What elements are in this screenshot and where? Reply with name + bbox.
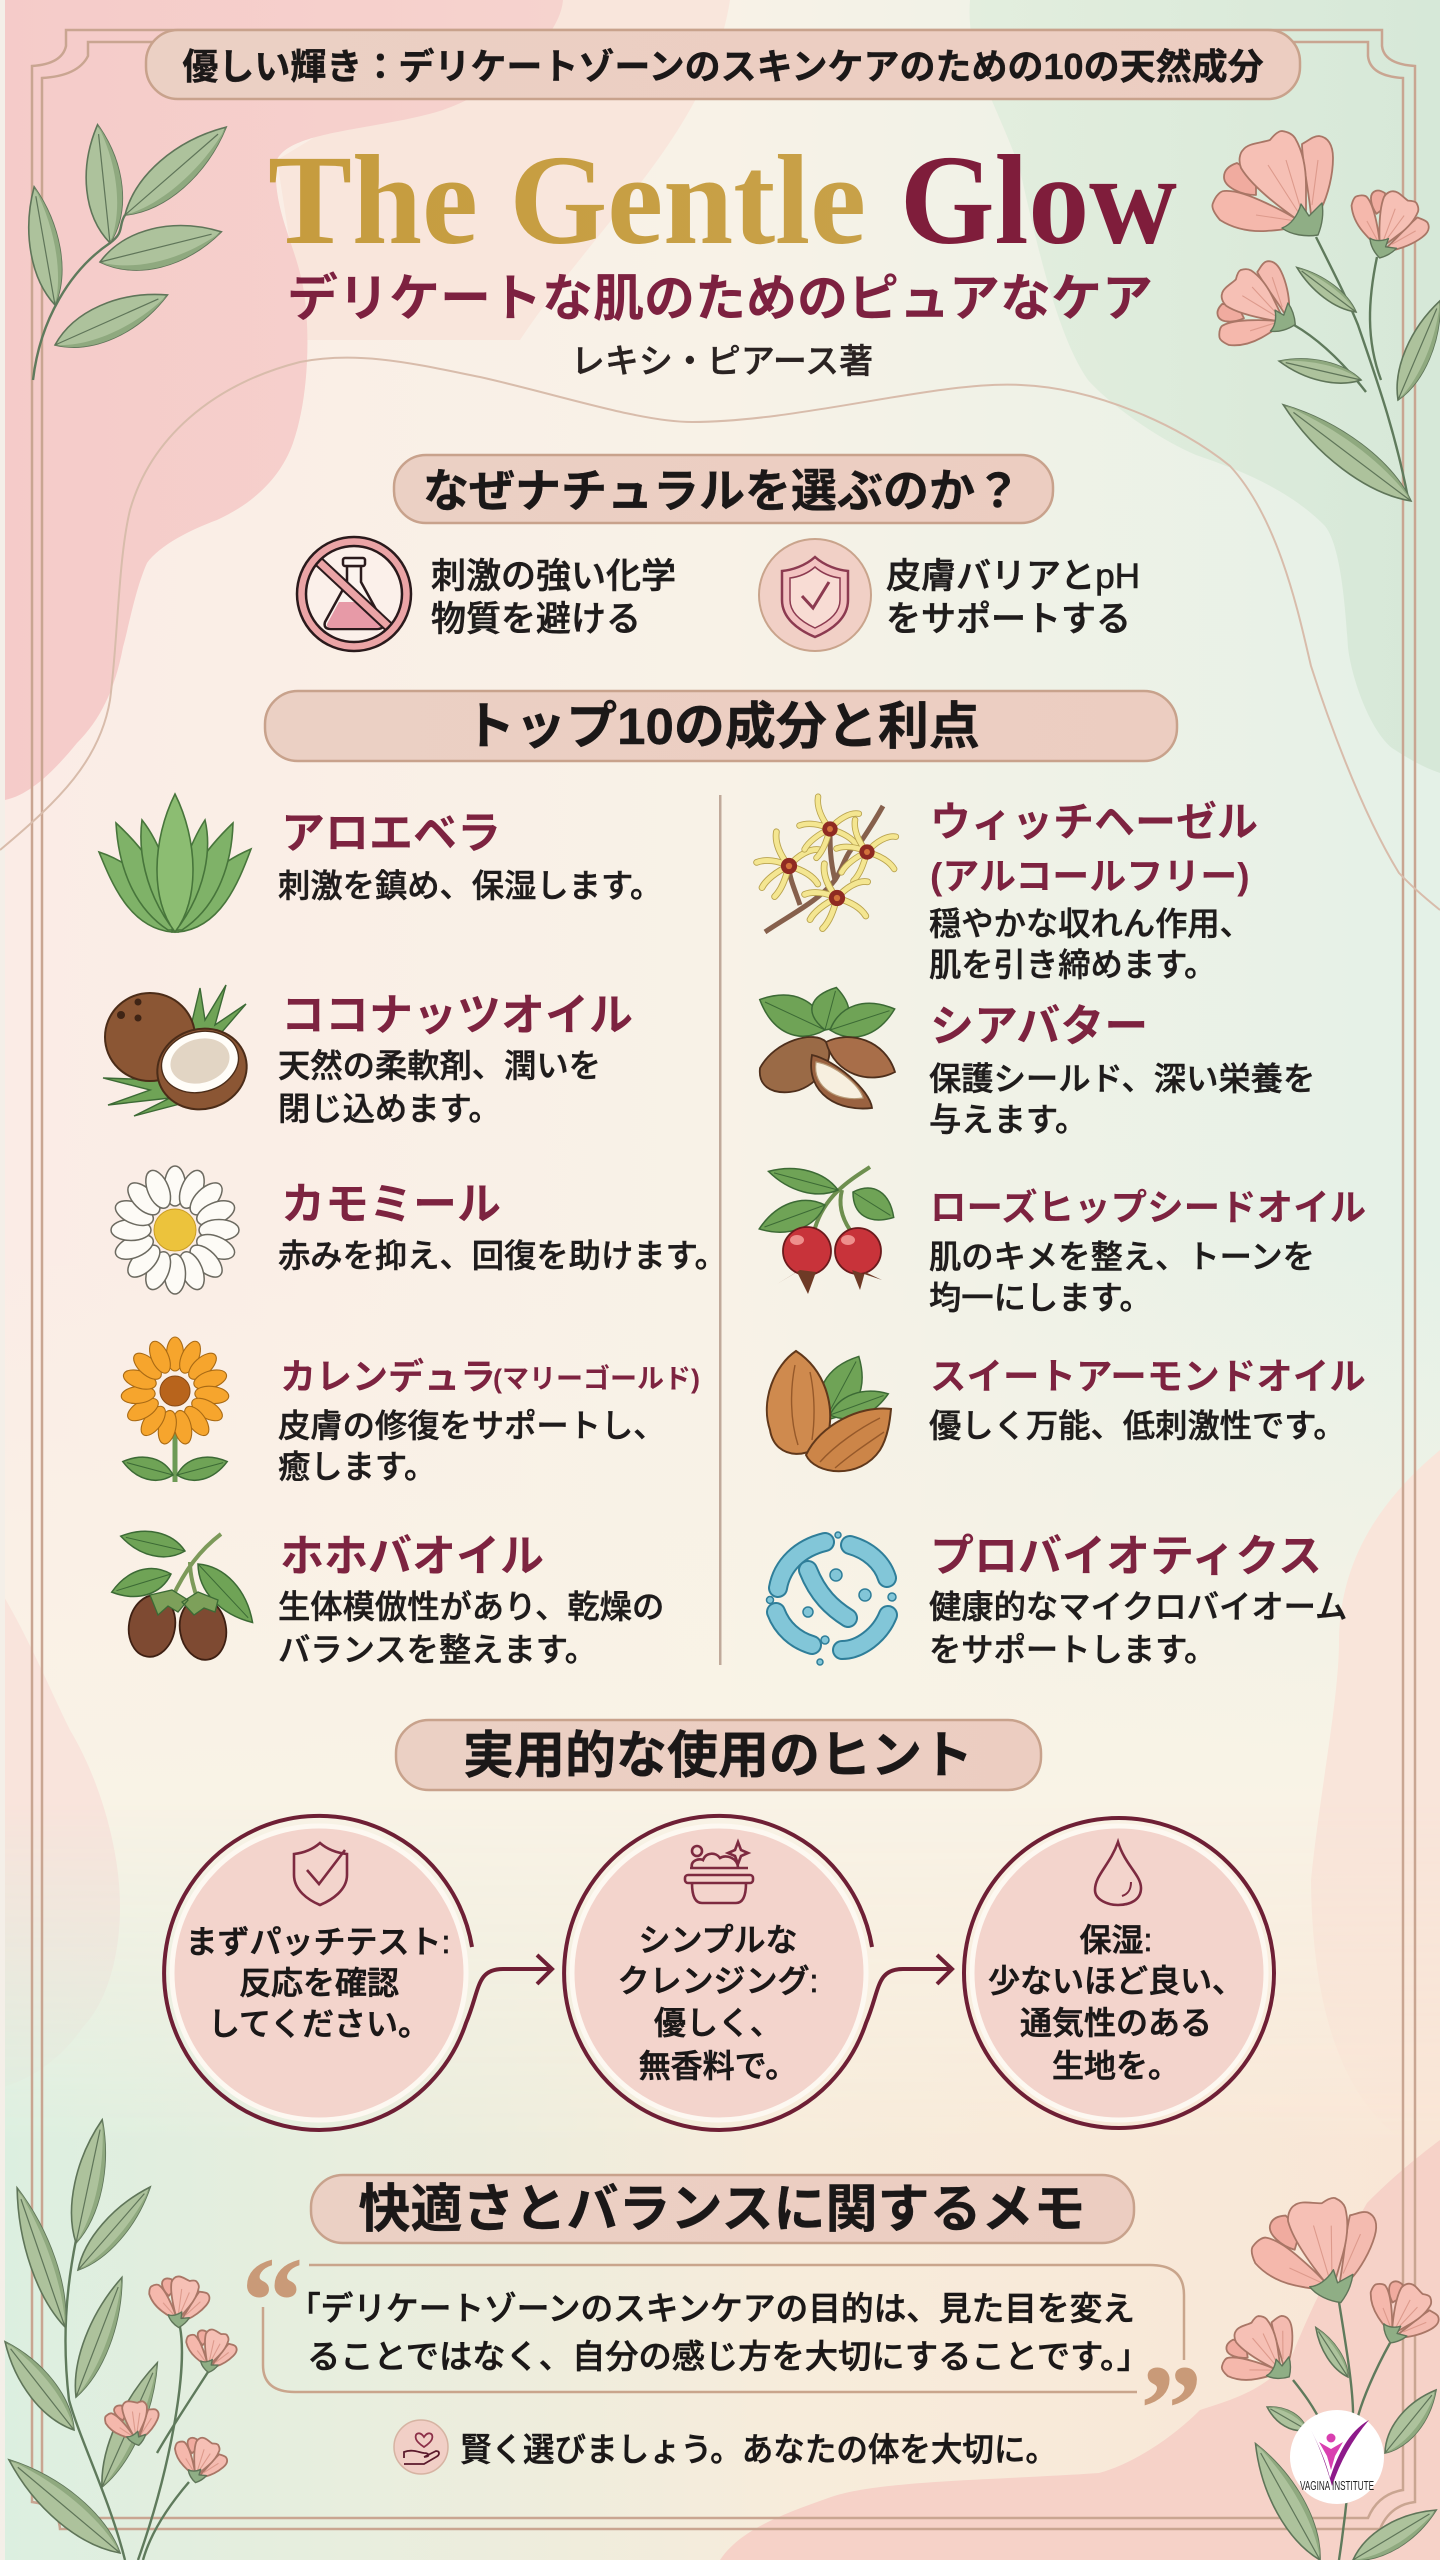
ingredient: shea butter [752,983,1315,1138]
icon: shield check [294,1843,347,1905]
ingredient: coconut oil [103,985,633,1127]
icon: opening quote mark: “ [241,2233,304,2371]
botanical: bottom left sprigs [0,2117,241,2560]
heading: top 10 [265,691,1177,761]
ingredient: shea butter: 保護シールド、深い栄養を [929,1061,1315,1097]
ingredient: calendula: (マリーゴールド) [493,1363,700,1394]
tip 3: moisturize [964,1818,1274,2128]
ingredient: sweet almond oil [767,1348,1366,1471]
tip 3: moisturize: 生地を。 [1052,2048,1180,2084]
icon: water drop [1095,1842,1141,1905]
text: support barrier: をサポートする [886,600,1131,639]
ingredient: rosehip seed oil: 肌のキメを整え、トーンを [929,1239,1315,1275]
icon: jojoba [108,1525,263,1664]
tip 1: patch test [164,1816,552,2130]
tip 3: moisturize: 通気性のある [1020,2005,1212,2041]
ingredient: witch hazel [757,797,1258,983]
icon: shield [759,539,871,651]
logo: institute badge [1290,2410,1384,2504]
column divider [719,795,722,1665]
ingredient: witch hazel: ウィッチヘーゼル [930,799,1258,845]
icon: witch hazel [757,797,896,932]
ingredient: chamomile: カモミール [281,1180,501,1229]
title: The Gentle [268,129,866,271]
ingredient: coconut oil: 閉じ込めます。 [278,1091,501,1127]
ingredient: jojoba oil: バランスを整えます。 [278,1632,597,1668]
botanical: bottom right flowers [1215,2180,1440,2560]
icon: chamomile [111,1166,239,1294]
text: support barrier: 皮膚バリアとpH [886,557,1140,596]
ingredient: coconut oil: ココナッツオイル [281,991,633,1040]
heading: practical tips [396,1720,1041,1790]
ingredient: sweet almond oil: スイートアーモンドオイル [930,1356,1366,1397]
text: support barrier [886,557,1140,639]
callout: quote box: 「デリケートゾーンのスキンケアの目的は、見た目を変え [288,2290,1135,2327]
ingredient: rosehip seed oil [755,1161,1366,1316]
ingredient: shea butter: シアバター [930,1002,1148,1051]
title: Glow [900,129,1177,271]
ring with arrow [564,1816,952,2130]
ingredient: aloe vera: 刺激を鎮め、保湿します。 [278,868,662,904]
text: avoid chemicals [431,557,676,639]
icon: shea [752,983,899,1109]
ingredient: witch hazel: 穏やかな収れん作用、 [929,906,1252,942]
tip 2: cleansing: シンプルな [638,1922,798,1958]
ingredient: rosehip seed oil: 均一にします。 [929,1280,1152,1316]
ingredient: witch hazel: (アルコールフリー) [930,856,1250,897]
author: レキシ・ピアース著 [571,343,873,381]
icon: caring hand [394,2420,448,2474]
callout: quote box [241,2233,1202,2479]
text: avoid chemicals: 物質を避ける [431,600,641,639]
heading: practical tips: 実用的な使用のヒント [463,1727,973,1784]
heading: top 10: トップ10の成分と利点 [464,698,980,755]
ingredient: jojoba oil: ホホバオイル [280,1532,544,1581]
icon: calendula [120,1337,230,1485]
ingredient: calendula: 皮膚の修復をサポートし、 [278,1408,666,1444]
ingredient: calendula: カレンデュラ [280,1356,496,1397]
ingredient: chamomile [111,1166,727,1294]
tip 3: moisturize: 少ないほど良い、 [988,1963,1244,1999]
top banner: 優しい輝き：デリケートゾーンのスキンケアのための10の天然成分 [182,46,1264,87]
heading: comfort notes: 快適さとバランスに関するメモ [359,2181,1085,2239]
icon: wash basin [685,1842,753,1903]
icon: aloe [99,794,251,932]
title [268,129,1177,271]
icon: probiotics [766,1532,896,1665]
ingredient: jojoba oil: 生体模倣性があり、乾燥の [278,1589,664,1625]
tip 1: patch test: してください。 [208,2006,430,2042]
tip 1: patch test: まずパッチテスト: [186,1924,450,1960]
top banner [146,30,1300,99]
icon: coconut [103,985,256,1119]
tip 2: cleansing: 無香料で。 [639,2048,797,2084]
tip 2: cleansing [564,1816,952,2130]
ingredient: aloe vera: アロエベラ [281,809,501,858]
ingredient: probiotics: をサポートします。 [929,1632,1216,1668]
subtitle: デリケートな肌のためのピュアなケア [287,270,1153,327]
tip 2: cleansing: クレンジング: [618,1963,818,1999]
decoration: arch line [0,358,1440,910]
icon: almond [767,1348,892,1471]
ingredient: probiotics [766,1532,1347,1668]
ring with arrow [164,1816,552,2130]
closing message [394,2420,1057,2474]
ingredient: aloe vera [99,794,662,932]
tip 3: moisturize: 保湿: [1080,1922,1152,1958]
ingredient: probiotics: 健康的なマイクロバイオーム [929,1589,1347,1625]
heading: why natural [394,455,1053,523]
ingredient: probiotics: プロバイオティクス [930,1532,1322,1581]
ingredient: rosehip seed oil: ローズヒップシードオイル [930,1187,1366,1228]
text: avoid chemicals: 刺激の強い化学 [431,557,676,596]
ingredient: witch hazel: 肌を引き締めます。 [929,947,1216,983]
heading: why natural: なぜナチュラルを選ぶのか？ [423,465,1021,517]
ingredient: sweet almond oil: 優しく万能、低刺激性です。 [929,1408,1346,1444]
ingredient: calendula: 癒します。 [278,1449,436,1485]
ingredient: chamomile: 赤みを抑え、回復を助けます。 [278,1238,727,1274]
icon: closing quote mark: ” [1140,2341,1202,2479]
logo: institute badge: VAGINA INSTITUTE [1300,2478,1374,2493]
ingredient: coconut oil: 天然の柔軟剤、潤いを [278,1048,601,1084]
botanical: top right flowers [1197,131,1440,513]
icon: rosehip [755,1161,901,1294]
ingredient: shea butter: 与えます。 [929,1102,1087,1138]
closing message: 賢く選びましょう。あなたの体を大切に。 [460,2431,1057,2468]
ingredient: jojoba oil [108,1525,664,1668]
tip 2: cleansing: 優しく、 [654,2005,782,2041]
callout: quote box: ることではなく、自分の感じ方を大切にすることです。」 [307,2338,1150,2375]
tip 1: patch test: 反応を確認 [239,1965,399,2001]
botanical: top left sprig [20,114,238,380]
ingredient: calendula [120,1337,700,1485]
icon: no harsh chemicals [297,537,411,651]
